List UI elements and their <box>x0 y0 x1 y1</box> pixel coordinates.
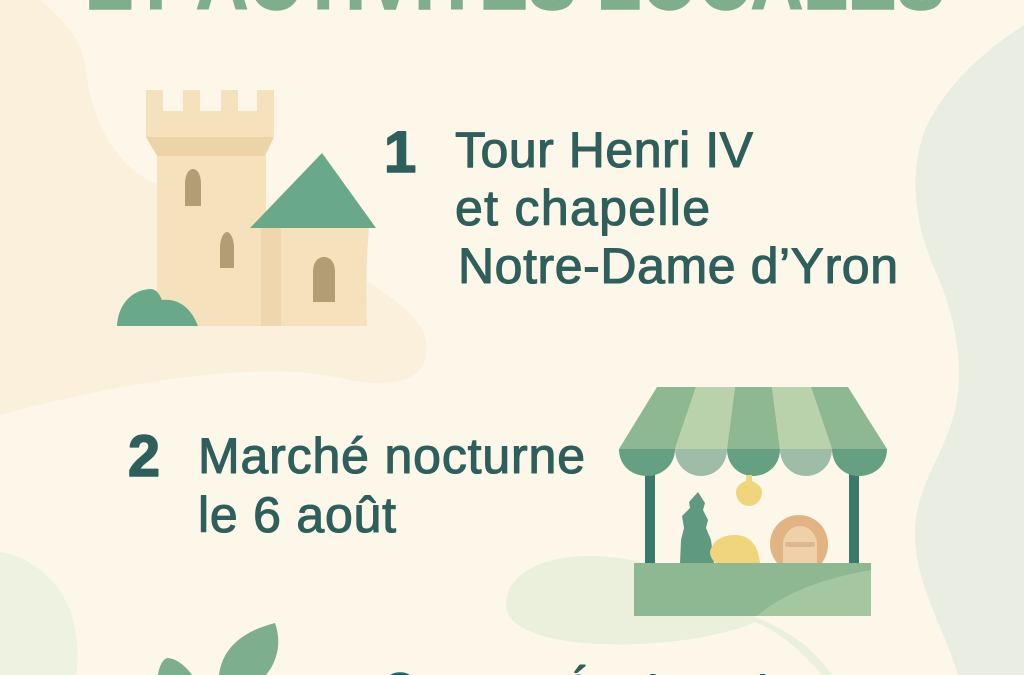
counter <box>634 563 871 616</box>
item 2: text: le 6 août <box>198 487 396 543</box>
tower corbel <box>146 137 274 156</box>
awning scallops <box>619 449 675 476</box>
leaf left <box>158 658 192 675</box>
produce: peach band <box>785 542 815 547</box>
hanging lantern <box>736 475 762 506</box>
icon: castle tower and chapel <box>117 90 376 326</box>
chapel roof <box>250 153 376 228</box>
item 1: text: Tour Henri IV <box>455 122 754 178</box>
background blob: pale green centre <box>506 556 832 675</box>
item 1: text: et chapelle <box>455 180 710 236</box>
chapel window <box>313 257 335 302</box>
item 1: text: Notre-Dame d’Yron <box>458 238 898 294</box>
item 1: text <box>455 122 898 294</box>
tower battlements <box>146 90 274 137</box>
produce: peach round <box>770 515 828 563</box>
leaf right <box>219 623 278 675</box>
awning stripes <box>619 387 696 449</box>
chapel shaded band <box>261 228 281 326</box>
background blob: peach top left <box>0 0 427 415</box>
icon: leaves <box>158 623 278 675</box>
item 2: text <box>198 428 585 543</box>
item 2: text: Marché nocturne <box>198 428 585 484</box>
item 2: number: 2 <box>128 424 160 489</box>
produce: green tree shape <box>680 492 714 563</box>
counter highlight <box>757 570 871 616</box>
background blob: grey green right <box>915 25 1024 675</box>
tower body <box>157 156 266 326</box>
chapel body <box>261 228 369 326</box>
item 1: number: 1 <box>384 120 416 185</box>
produce: yellow round <box>710 535 760 563</box>
produce: peach inner detail <box>783 526 817 563</box>
icon: market stall <box>619 387 887 616</box>
tower windows <box>185 169 234 268</box>
bush <box>117 289 198 326</box>
background blob: pale green bottom left <box>0 552 78 675</box>
stall posts <box>645 470 655 565</box>
